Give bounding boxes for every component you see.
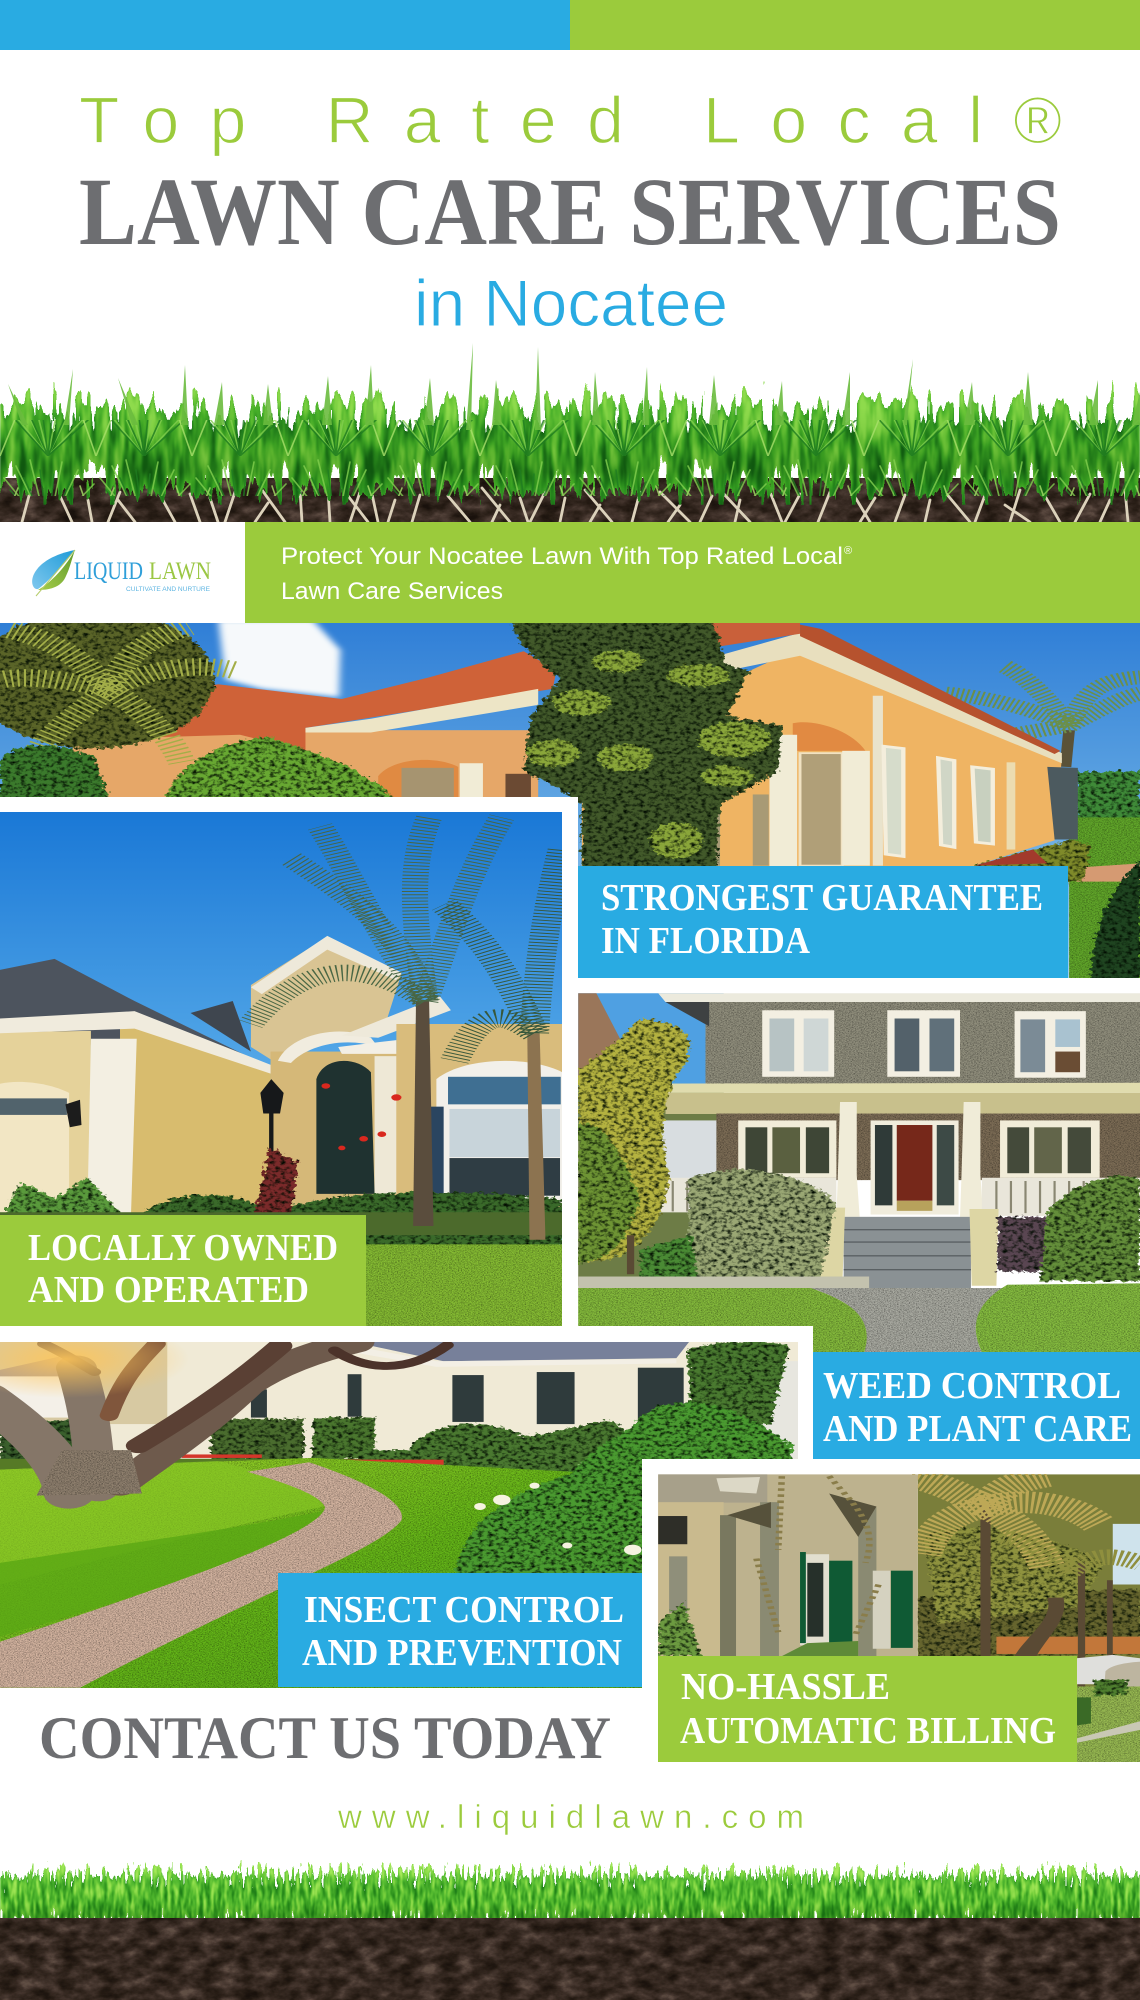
flowering bush [455,1415,655,1580]
callout: locally owned: LOCALLY OWNED [28,1227,338,1269]
long blades [8,343,1140,430]
columns [836,1102,983,1217]
tree [578,1019,690,1263]
lawn [1076,1686,1140,1765]
photo: palm tree house [0,812,562,1327]
logo wordmark: LIQUID [74,558,143,585]
callout: no-hassle billing: AUTOMATIC BILLING [680,1710,1056,1752]
callout: weed control: WEED CONTROL [823,1365,1121,1407]
lawn [0,1458,655,1693]
title: Lawn Care Services: LAWN CARE SERVICES [79,158,1061,265]
red flowers [321,1083,401,1150]
bushes [138,1192,562,1249]
title: in Nocatee: in Nocatee [414,266,728,340]
callout: strongest guarantee [578,866,1068,978]
callout: locally owned: AND OPERATED [28,1269,309,1311]
front lawn and path [578,1277,869,1290]
footer soil [0,1918,1140,2000]
icon: leaf logo [32,550,75,596]
callout: strongest guarantee: IN FLORIDA [601,920,811,962]
stone path [0,1462,402,1688]
front door [871,1120,959,1215]
photo: tropical villa [658,1474,1140,1765]
callout: no-hassle billing: NO-HASSLE [681,1666,890,1708]
house wall [658,1474,918,1659]
white roots [22,488,1128,522]
website address: www.liquidlawn.com [337,1798,804,1835]
logo tagline: CULTIVATE AND NURTURE [126,586,210,593]
steps [844,1217,971,1288]
front shrub [164,737,396,801]
banner: green panel [245,522,1140,623]
pillars [815,1208,999,1288]
banner text: Protect Your Nocatee Lawn With Top Rated Local [281,543,843,570]
callout: insect control: AND PREVENTION [302,1632,622,1674]
footer grass and soil [0,1874,1140,2000]
heading: contact us today: CONTACT US TODAY [39,1705,611,1771]
left roof and wing [73,730,538,804]
photo: garden path house [0,1320,807,1693]
title: Top Rated Local: Top Rated Local® [79,83,1062,157]
callout: insect control: INSECT CONTROL [304,1589,624,1631]
left palm [0,611,215,749]
photo: craftsman porch house [578,993,1140,1359]
right wing wall [582,656,1062,866]
parked cars [1076,1655,1140,1684]
callout: weed control [813,1352,1140,1459]
banner text: ® [844,545,852,557]
green shutters [800,1552,913,1649]
palm fronds [909,1476,1140,1572]
banner text: Lawn Care Services [281,578,503,605]
grass body [0,408,1140,488]
center tree [509,620,782,868]
banner: logo panel [0,522,245,623]
hedges [0,1416,378,1459]
shrubs [687,1170,836,1288]
callout: no-hassle billing [658,1656,1077,1762]
tree trunk and limbs [0,1342,447,1493]
right palm [945,666,1140,767]
lamp post [260,1079,284,1152]
footer grass [0,1874,1140,1924]
porch rails [658,1178,1140,1216]
soil band [0,478,1140,522]
windows [884,746,903,856]
hero grass with roots [0,343,1140,522]
banner: logo panel: LAWN [149,558,211,585]
trunks [413,1001,433,1226]
photo: terracotta roof house [0,611,1140,987]
upper windows [762,1010,1086,1078]
callout: strongest guarantee: STRONGEST GUARANTEE [601,877,1043,919]
callout: locally owned [0,1215,366,1326]
palm crown fronds [251,817,562,1061]
fanned blade tufts [0,420,1140,496]
lower windows [738,1120,1100,1178]
top colour bar [0,0,1140,50]
callout: insect control [278,1573,642,1687]
